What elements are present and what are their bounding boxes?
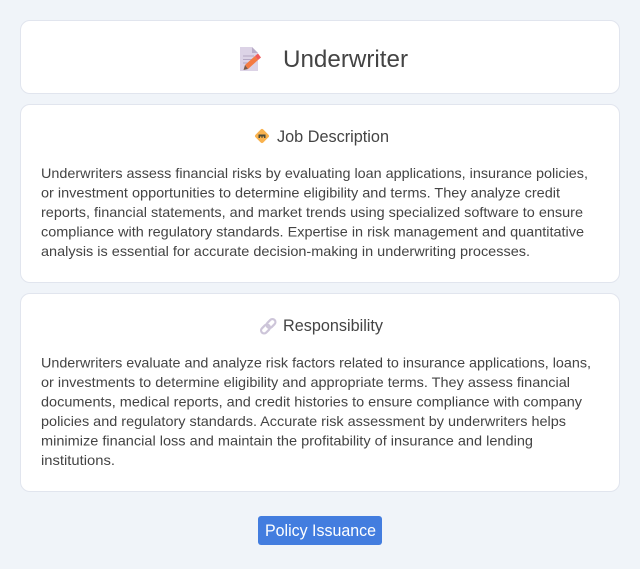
responsibility text: institutions. bbox=[41, 452, 115, 468]
icon: document with pencil bbox=[240, 47, 261, 71]
panel: job description bbox=[20, 104, 620, 283]
icon: chain link bbox=[260, 318, 277, 335]
responsibility text: or investments to determine eligibility and appropriate terms. They assess financial bbox=[41, 374, 570, 390]
heading: responsibility: Responsibility bbox=[283, 317, 384, 335]
job description text: reports, financial statements, and market trends using specialized software to ensure bbox=[41, 204, 583, 220]
icon: diamond sign bbox=[254, 128, 270, 144]
responsibility text: policies and regulatory standards. Accurate risk assessment by underwriters helps bbox=[41, 413, 566, 429]
job description text: Underwriters assess financial risks by evaluating loan applications, insurance policies, bbox=[41, 165, 588, 181]
heading: job description: Job Description bbox=[277, 128, 389, 146]
responsibility text: documents, medical reports, and credit histories to ensure compliance with company bbox=[41, 394, 582, 410]
job description text: analysis is essential for accurate decision-making in underwriting processes. bbox=[41, 243, 530, 259]
title text: Underwriter bbox=[283, 46, 408, 73]
panel: responsibility bbox=[20, 293, 620, 492]
button: policy issuance: Policy Issuance bbox=[265, 522, 376, 540]
responsibility text: Underwriters evaluate and analyze risk factors related to insurance applications, loans, bbox=[41, 354, 591, 370]
job description text: compliance with regulatory standards. Expertise in risk management and quantitative bbox=[41, 224, 584, 240]
responsibility text: minimize financial loss and maintain the profitability of insurance and lending bbox=[41, 432, 533, 448]
responsibility text bbox=[41, 354, 591, 468]
button: policy issuance bbox=[258, 516, 382, 545]
job description text bbox=[41, 165, 588, 259]
panel: title bbox=[20, 20, 620, 94]
job description text: or investment opportunities to determine eligibility and terms. They analyze credit bbox=[41, 184, 560, 200]
